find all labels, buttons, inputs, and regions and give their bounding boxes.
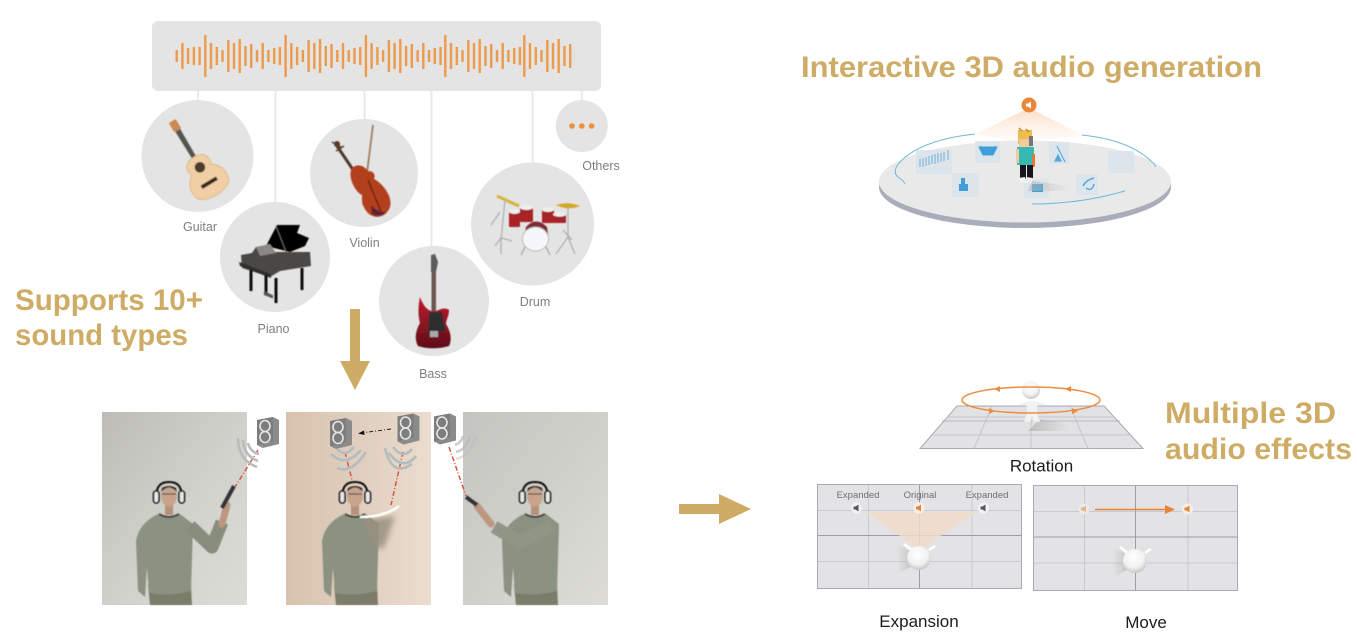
heading: supports 10+ sound types: Supports 10+ <box>15 284 203 317</box>
source labels: Original <box>904 490 936 501</box>
bass label: Bass <box>419 367 447 381</box>
panel: gesture photos <box>102 412 608 605</box>
panel: sound types <box>142 21 620 381</box>
source labels <box>837 490 1008 501</box>
speaker and sound waves, left <box>235 417 279 487</box>
photo: swiping <box>286 412 431 605</box>
speakers moving <box>330 414 420 505</box>
rotation illustration <box>920 381 1143 448</box>
source labels: Expanded <box>837 490 879 501</box>
source labels: Expanded <box>966 490 1008 501</box>
heading: multiple 3D audio effects <box>1165 397 1352 466</box>
figure shadow <box>1028 419 1070 431</box>
waveform bar <box>152 21 601 91</box>
rotation ring with arrows <box>962 386 1100 414</box>
expansion label: Expansion <box>879 612 959 631</box>
violin label: Violin <box>349 236 380 250</box>
arrow: right <box>679 494 751 524</box>
panel: move <box>1034 486 1238 590</box>
heading: multiple 3D audio effects: Multiple 3D <box>1165 397 1336 430</box>
heading: supports 10+ sound types: sound types <box>15 319 188 352</box>
heading: multiple 3D audio effects: audio effects <box>1165 433 1352 466</box>
shadow of character <box>1028 181 1070 191</box>
sound cone <box>975 108 1083 140</box>
photo: pointing right <box>102 412 247 605</box>
rotation floor <box>920 406 1143 448</box>
speaker icons <box>1078 504 1193 514</box>
speaker icons <box>851 502 989 514</box>
heading: interactive 3D audio generation: Interactive 3D audio generation <box>801 51 1262 84</box>
expansion cone <box>866 512 976 550</box>
audio tiles <box>916 141 1134 198</box>
figure <box>1020 381 1046 421</box>
speaker icon <box>1022 98 1036 112</box>
others label: Others <box>582 159 620 173</box>
arrow: down <box>340 309 370 390</box>
platform illustration <box>879 98 1171 228</box>
guitar label: Guitar <box>183 220 217 234</box>
orbit arcs <box>895 134 1155 204</box>
platform disc <box>879 140 1171 228</box>
bass circle <box>379 246 489 356</box>
arrow: speaker movement <box>358 429 391 435</box>
listener <box>1113 547 1151 577</box>
speaker and sound waves, right <box>434 414 476 496</box>
drum circle <box>471 162 594 286</box>
voxel character <box>1016 128 1035 184</box>
others circle <box>556 100 608 152</box>
piano circle <box>220 202 330 312</box>
connector lines <box>198 90 582 250</box>
move label: Move <box>1125 613 1167 632</box>
arrow: move <box>1095 505 1175 514</box>
guitar circle <box>142 100 254 212</box>
heading: supports 10+ sound types <box>15 284 203 352</box>
drum label: Drum <box>520 295 550 309</box>
piano label: Piano <box>258 322 290 336</box>
violin circle <box>310 119 418 227</box>
photo: pointing left <box>463 412 608 605</box>
panel: expansion <box>818 484 1022 588</box>
rotation label: Rotation <box>1010 456 1073 476</box>
listener <box>897 544 935 574</box>
